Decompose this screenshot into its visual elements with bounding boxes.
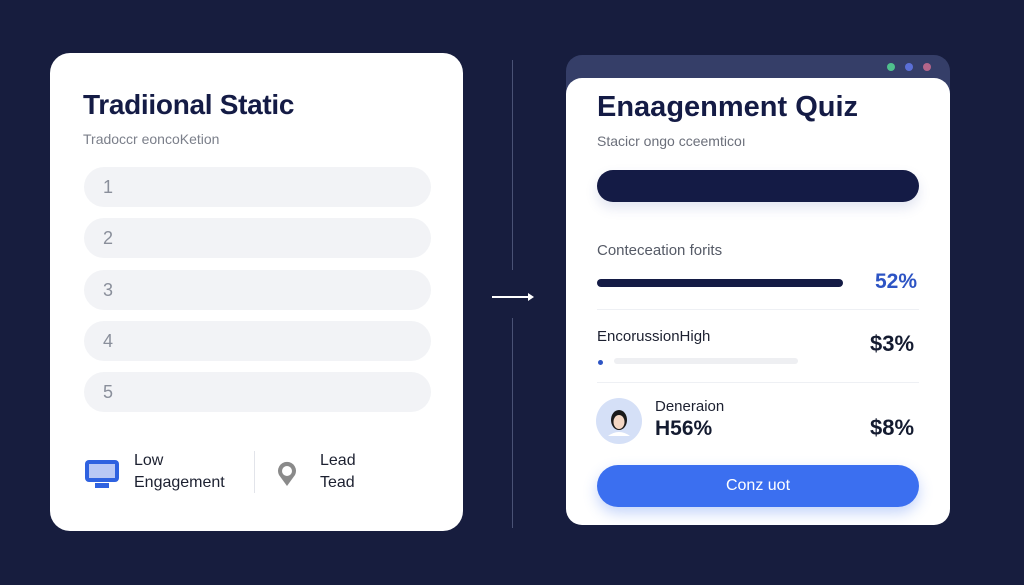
icon: monitor <box>85 460 119 488</box>
window header <box>566 55 950 115</box>
icon: location pin <box>278 462 296 486</box>
subtitle: Stacicr ongo cceemticoı <box>597 133 746 149</box>
metric: deneraion <box>655 398 914 440</box>
list row 4: 4 <box>103 331 113 351</box>
text: lead tead: Tead <box>320 474 355 491</box>
arrow <box>492 293 534 301</box>
list row 2 <box>84 218 431 258</box>
list row 2: 2 <box>103 228 113 248</box>
metric: deneraion: H56% <box>655 417 712 440</box>
avatar icon <box>596 398 642 444</box>
list row 5: 5 <box>103 382 113 402</box>
heading: engagement quiz: Enaagenment Quiz <box>597 91 858 123</box>
text: lead tead <box>320 452 356 491</box>
metric: conteceation forits <box>597 242 917 293</box>
list row 4 <box>84 321 431 361</box>
list row 3 <box>84 270 431 310</box>
metric: encorussionhigh: $3% <box>870 331 914 356</box>
metric: conteceation forits: 52% <box>875 270 917 293</box>
list row 3: 3 <box>103 280 113 300</box>
subtitle: Tradoccr eoncoKetion <box>83 131 219 147</box>
metric: encorussionhigh: EncorussionHigh <box>597 328 710 345</box>
metric: encorussionhigh <box>597 328 914 365</box>
heading: traditional static: Tradiional Static <box>83 89 294 120</box>
metric: deneraion: Deneraion <box>655 398 724 415</box>
text: lead tead: Lead <box>320 452 356 469</box>
panel: engagement quiz <box>566 78 950 525</box>
metric: conteceation forits: Conteceation forits <box>597 242 722 259</box>
list row 1 <box>84 167 431 207</box>
text: low engagement <box>134 452 225 491</box>
text: low engagement: Low <box>134 452 163 469</box>
button: Conz uot <box>726 477 790 494</box>
panel: traditional static <box>50 53 463 531</box>
button <box>597 465 919 507</box>
list row 5 <box>84 372 431 412</box>
text: low engagement: Engagement <box>134 474 225 491</box>
dark bar <box>597 170 919 202</box>
list row 1: 1 <box>103 177 113 197</box>
metric: deneraion: $8% <box>870 415 914 440</box>
